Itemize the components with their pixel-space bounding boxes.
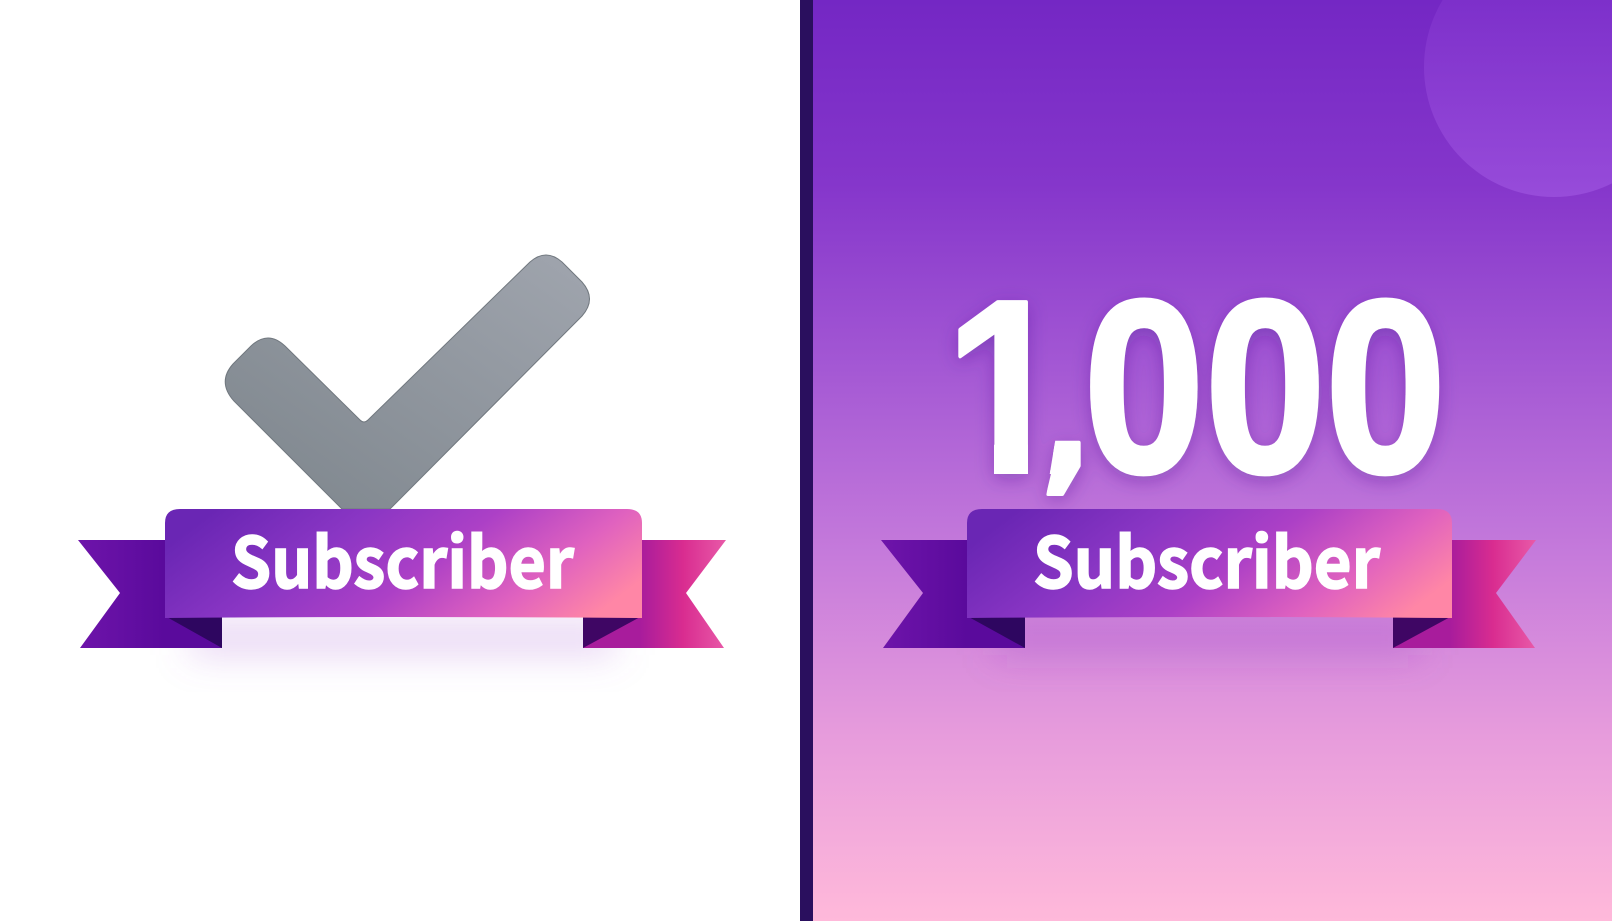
ribbon right fold bbox=[1393, 616, 1452, 648]
vertical divider bbox=[800, 0, 813, 921]
big number: 0 bbox=[1083, 250, 1205, 525]
big number: , bbox=[1041, 328, 1093, 509]
ribbon left fold bbox=[967, 616, 1025, 648]
ribbon left tail bbox=[78, 540, 222, 648]
ribbon main band bbox=[967, 509, 1452, 618]
big number: 0 bbox=[1325, 250, 1446, 525]
ribbon main band bbox=[165, 509, 642, 618]
ribbon right fold bbox=[583, 616, 642, 648]
ribbon shadow bbox=[190, 620, 615, 656]
ribbon: right panel Subscriber bbox=[881, 508, 1536, 656]
big number bbox=[952, 298, 1446, 506]
ribbon label: Subscriber bbox=[231, 508, 574, 609]
ribbon shadow bbox=[995, 620, 1420, 656]
big number: 1 bbox=[945, 250, 1067, 525]
ribbon right tail bbox=[583, 540, 726, 648]
icon: gray check mark bbox=[225, 255, 590, 509]
ribbon left tail bbox=[881, 540, 1025, 648]
ribbon label: Subscriber bbox=[1033, 508, 1380, 609]
ribbon: left panel Subscriber bbox=[78, 508, 726, 656]
big number: 0 bbox=[1204, 250, 1326, 525]
decorative circle top right bbox=[1424, 0, 1612, 197]
ribbon right tail bbox=[1393, 540, 1536, 648]
panel: right purple-pink gradient background bbox=[813, 0, 1612, 921]
ribbon left fold bbox=[165, 616, 222, 648]
panel: left white background bbox=[0, 0, 800, 921]
